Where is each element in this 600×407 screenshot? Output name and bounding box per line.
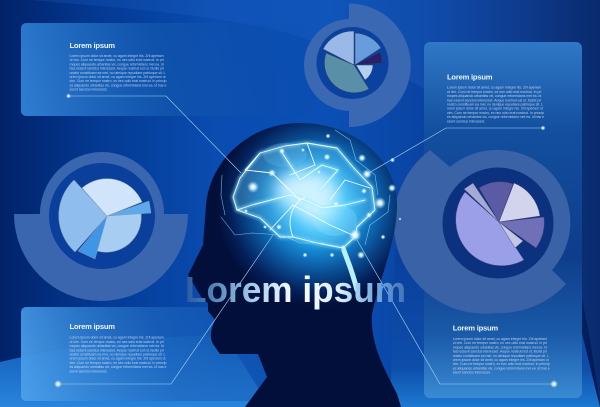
panel: top left [21, 23, 341, 116]
text block: lower: Lorem ipsum dolor sit amet, cu agam integre his. Zril aperiam [453, 337, 547, 341]
text block: ssent sanctus interesset. [70, 369, 108, 373]
pie chart: top [304, 4, 411, 127]
heading: Lorem ipsum [70, 41, 115, 50]
text block: ut vim. Cum ne tempor nostro, ex nec odio erat nostrud. In pri [70, 340, 164, 344]
text block: vim. Cum ne tempor nostro, ex nec odio erat nostrud. In princip [70, 361, 166, 365]
text block: mopes aliquando urbanitas vix, congue reformidans mel ea. Id [70, 62, 164, 66]
text block: es aliquando urbanitas vix, congue reformidans mel ea. Id has e [447, 115, 544, 119]
text block: vim. Cum ne tempor nostro, ex nec odio erat nostrud. In princip [447, 111, 544, 115]
text block: has essent sanctus interesset. Aeque nostrud est ut, facilis pri [447, 98, 541, 102]
text block: lower: nostro constituam ea mei, no denique repudiare patrioque sit. L [453, 354, 549, 358]
text block: ssent sanctus interesset. [70, 88, 108, 92]
text block: nostro constituam ea mei, no denique repudiare patrioque sit. L [70, 71, 166, 75]
glowing nodes [54, 94, 558, 388]
text block: lower [453, 337, 550, 375]
text block [447, 86, 544, 123]
text block: lower: mopes aliquando urbanitas vix, congue reformidans mel ea. Id [453, 345, 547, 349]
text block: Lorem ipsum dolor sit amet, cu agam integre his. Zril aperiam [70, 336, 164, 340]
text block: orem ipsum dolor sit amet, cu agam integre his. Zril aperiam ut [447, 107, 543, 111]
text block: Lorem ipsum dolor sit amet, cu agam integre his. Zril aperiam [447, 86, 541, 90]
pie chart: right [394, 150, 570, 314]
pie chart: left [14, 152, 188, 301]
text block: es aliquando urbanitas vix, congue reformidans mel ea. Id has e [70, 83, 166, 87]
text block: lower: es aliquando urbanitas vix, congue reformidans mel ea. Id has e [453, 366, 550, 370]
title: Lorem ipsum [185, 269, 406, 310]
panel: right tall [424, 42, 582, 398]
text block [70, 336, 166, 373]
leader lines [58, 96, 554, 384]
text block: Lorem ipsum dolor sit amet, cu agam integre his. Zril aperiam [70, 54, 164, 58]
text block: lower: orem ipsum dolor sit amet, cu agam integre his. Zril aperiam ut [453, 358, 549, 362]
text block: lower: vim. Cum ne tempor nostro, ex nec odio erat nostrud. In princip [453, 362, 550, 366]
text block: orem ipsum dolor sit amet, cu agam integre his. Zril aperiam ut [70, 357, 166, 361]
text block: mopes aliquando urbanitas vix, congue reformidans mel ea. Id [70, 344, 164, 348]
text block: es aliquando urbanitas vix, congue reformidans mel ea. Id has e [70, 365, 166, 369]
head silhouette [188, 123, 401, 407]
text block: ut vim. Cum ne tempor nostro, ex nec odio erat nostrud. In pri [447, 90, 541, 94]
text block: ssent sanctus interesset. [447, 119, 485, 123]
brain [221, 130, 390, 290]
text block: lower: ut vim. Cum ne tempor nostro, ex nec odio erat nostrud. In pri [453, 341, 547, 345]
text block: vim. Cum ne tempor nostro, ex nec odio erat nostrud. In princip [70, 79, 166, 83]
text block: lower: has essent sanctus interesset. Aeque nostrud est ut, facilis pri [453, 350, 547, 354]
text block: has essent sanctus interesset. Aeque nostrud est ut, facilis pri [70, 348, 164, 352]
heading: Lorem ipsum [447, 72, 493, 82]
text block: orem ipsum dolor sit amet, cu agam integre his. Zril aperiam ut [70, 75, 166, 79]
text block: nostro constituam ea mei, no denique repudiare patrioque sit. L [70, 352, 166, 356]
text block: mopes aliquando urbanitas vix, congue reformidans mel ea. Id [447, 94, 541, 98]
text block [70, 54, 166, 92]
panel: bottom left [21, 307, 281, 401]
text block: lower: ssent sanctus interesset. [453, 371, 491, 375]
heading: Lorem ipsum [70, 322, 115, 331]
text block: has essent sanctus interesset. Aeque nostrud est ut, facilis pri [70, 67, 164, 71]
text block: nostro constituam ea mei, no denique repudiare patrioque sit. L [447, 102, 543, 106]
text block: ut vim. Cum ne tempor nostro, ex nec odio erat nostrud. In pri [70, 58, 164, 62]
heading: lower: Lorem ipsum [453, 324, 498, 333]
